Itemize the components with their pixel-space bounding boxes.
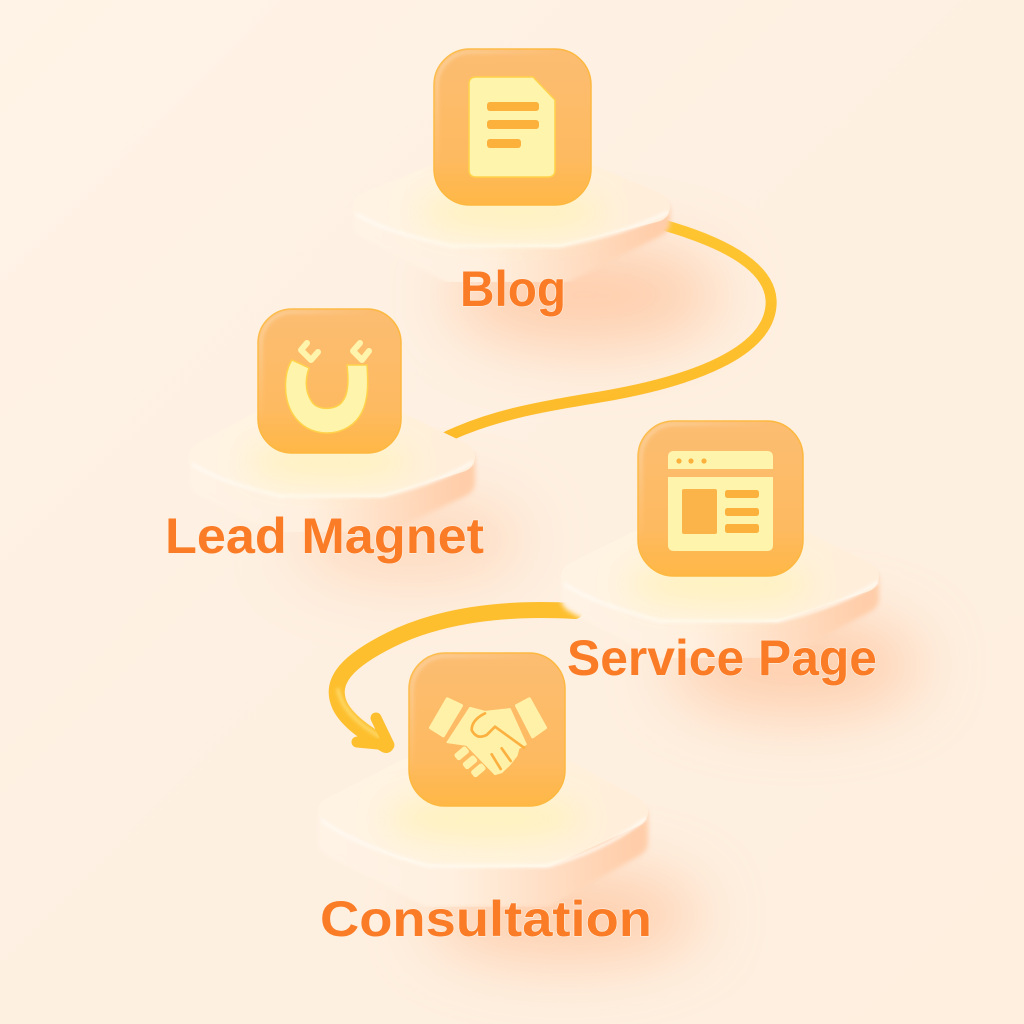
label: Lead Magnet: Lead Magnet — [165, 508, 484, 564]
step: Consultation — [320, 653, 652, 947]
tile: Consultation icon — [409, 653, 565, 806]
icon: browser window — [668, 451, 773, 551]
tile: Lead Magnet icon — [258, 309, 401, 453]
step: Lead Magnet — [165, 309, 484, 564]
label: Service Page: Service Page — [567, 630, 877, 686]
step: Blog — [356, 49, 668, 317]
tile: Blog icon — [434, 49, 591, 205]
arrow: Service Page to Consultation — [337, 610, 575, 745]
arrow: connector from Blog to Lead Magnet — [440, 224, 771, 440]
platform: Lead Magnet — [192, 415, 473, 520]
icon: handshake — [431, 699, 545, 778]
step: Service Page — [564, 421, 878, 686]
icon: magnet — [285, 343, 369, 433]
platform: Service Page — [564, 530, 878, 645]
label: Blog: Blog — [460, 261, 566, 317]
icon: document — [469, 77, 555, 177]
platform glow shadows — [295, 243, 920, 960]
tile: Service Page icon — [638, 421, 803, 576]
platform: Consultation — [321, 755, 646, 892]
label: Consultation: Consultation — [320, 891, 652, 947]
platform: Blog — [356, 166, 668, 270]
